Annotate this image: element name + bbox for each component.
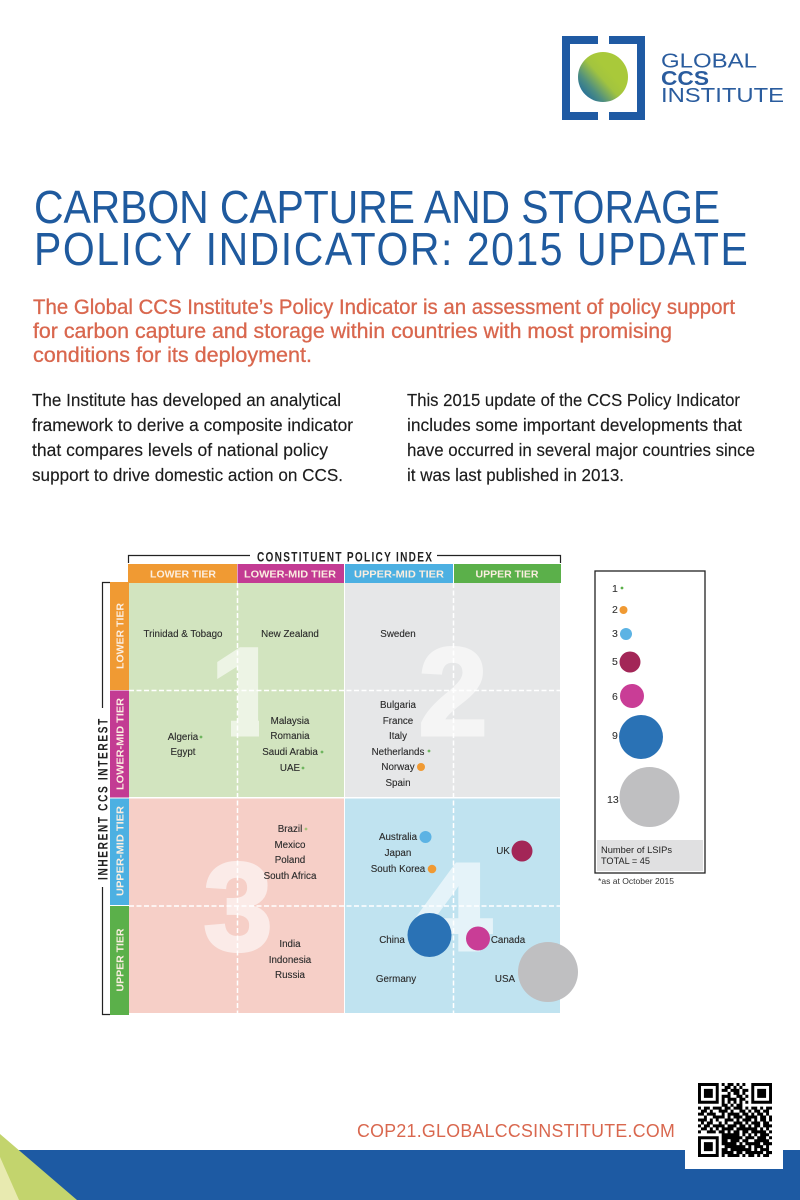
subtitle: conditions for its deployment. bbox=[33, 344, 312, 367]
title: POLICY INDICATOR: 2015 UPDATE bbox=[34, 225, 748, 276]
axis heading: constituent policy index: CONSTITUENT POLICY INDEX bbox=[257, 549, 433, 565]
text block: right column: includes some important developments that bbox=[407, 415, 742, 435]
quadrant 4 countries and bubbles: UK bbox=[496, 846, 510, 857]
quadrant 3: Poland bbox=[275, 855, 305, 866]
quadrant 2: 2 bbox=[418, 623, 488, 762]
text block: left column bbox=[32, 390, 353, 485]
text block: left column: that compares levels of national policy bbox=[32, 440, 328, 460]
title bbox=[34, 183, 748, 276]
quadrant 2 bbox=[345, 583, 560, 797]
quadrant 1: Trinidad & Tobago bbox=[144, 629, 223, 640]
quadrant 2: Netherlands bbox=[372, 747, 425, 758]
text block: right column: This 2015 update of the CCS Policy Indicator bbox=[407, 390, 740, 410]
legend entries: 1 bbox=[612, 583, 618, 595]
quadrant 3: Brazil bbox=[278, 824, 302, 835]
quadrant 3: Russia bbox=[275, 970, 306, 981]
quadrant 1: Algeria bbox=[168, 732, 199, 743]
quadrant 4 countries and bubbles bbox=[371, 831, 578, 1002]
legend total box bbox=[597, 840, 703, 871]
quadrant 1 bbox=[129, 583, 344, 797]
legend entries: 6 bbox=[612, 691, 618, 703]
website url: COP21.GLOBALCCSINSTITUTE.COM bbox=[357, 1121, 675, 1141]
subtitle: for carbon capture and storage within countries with most promising bbox=[33, 320, 672, 343]
icon: brackets and globe bbox=[562, 36, 645, 120]
quadrant 2: Bulgaria bbox=[380, 700, 417, 711]
text block: left column: The Institute has developed an analytical bbox=[32, 390, 341, 410]
quadrant 2: Sweden bbox=[380, 629, 416, 640]
quadrant 1: Malaysia bbox=[271, 716, 310, 727]
quadrant 2: Norway bbox=[381, 762, 415, 773]
column tier headers: LOWER TIER bbox=[150, 568, 216, 580]
quadrant 4 bbox=[345, 798, 560, 1013]
quadrant 4 countries and bubbles: China bbox=[379, 935, 405, 946]
subtitle: The Global CCS Institute’s Policy Indicator is an assessment of policy support bbox=[33, 296, 735, 319]
quadrant 4 countries and bubbles: Australia bbox=[379, 832, 418, 843]
legend footnote: *as at October 2015 bbox=[598, 876, 674, 886]
quadrant 3: India bbox=[279, 939, 301, 950]
title: CARBON CAPTURE AND STORAGE bbox=[34, 183, 720, 234]
legend entries: 2 bbox=[612, 604, 618, 616]
quadrant 4 countries and bubbles: Germany bbox=[376, 974, 416, 985]
text block: right column bbox=[407, 390, 755, 485]
logo wordmark: CCS bbox=[661, 68, 709, 90]
axis heading: inherent CCS interest: INHERENT CCS INTEREST bbox=[95, 718, 111, 880]
quadrant 1: Saudi Arabia bbox=[262, 747, 318, 758]
legend entries: 13 bbox=[607, 794, 619, 806]
text block: left column: support to drive domestic action on CCS. bbox=[32, 465, 343, 485]
row tier headers: UPPER-MID TIER bbox=[114, 806, 126, 896]
legend entries: 5 bbox=[612, 656, 618, 668]
column tier headers: UPPER-MID TIER bbox=[354, 568, 444, 580]
quadrant 3: 3 bbox=[203, 838, 273, 977]
column tier headers bbox=[128, 564, 561, 583]
quadrant 4 countries and bubbles: USA bbox=[495, 974, 516, 985]
logo wordmark: INSTITUTE bbox=[661, 85, 784, 107]
quadrant 4 countries and bubbles: South Korea bbox=[371, 864, 426, 875]
logo wordmark bbox=[661, 50, 784, 107]
logo wordmark: GLOBAL bbox=[661, 50, 757, 72]
legend entries: 9 bbox=[612, 730, 618, 742]
column tier headers: LOWER-MID TIER bbox=[244, 568, 336, 580]
legend: number of LSIPs bbox=[595, 571, 705, 873]
quadrant 3: Mexico bbox=[274, 840, 306, 851]
quadrant 3: Indonesia bbox=[269, 955, 312, 966]
quadrant 2: Italy bbox=[389, 731, 407, 742]
quadrant 4: 4 bbox=[414, 838, 492, 977]
quadrant 3: South Africa bbox=[264, 871, 317, 882]
quadrant 2: France bbox=[383, 716, 414, 727]
quadrant 2: Spain bbox=[385, 778, 411, 789]
quadrant 1: New Zealand bbox=[261, 629, 319, 640]
row tier headers: UPPER TIER bbox=[114, 928, 126, 992]
row tier headers: LOWER-MID TIER bbox=[114, 698, 126, 790]
row tier headers: LOWER TIER bbox=[114, 603, 126, 669]
quadrant 4 countries and bubbles: Japan bbox=[385, 848, 411, 859]
axis heading: inherent CCS interest bbox=[95, 582, 111, 1014]
QR code bbox=[685, 1070, 783, 1169]
legend entries: 3 bbox=[612, 628, 618, 640]
legend total box: TOTAL = 45 bbox=[601, 856, 650, 867]
footer band bbox=[0, 1134, 800, 1200]
axis heading: constituent policy index bbox=[128, 549, 560, 565]
legend total box: Number of LSIPs bbox=[601, 845, 672, 856]
quadrant 1: Romania bbox=[270, 731, 310, 742]
legend entries bbox=[607, 583, 680, 827]
quadrant 1: UAE bbox=[280, 763, 301, 774]
quadrant 1: 1 bbox=[210, 623, 280, 762]
text block: left column: framework to derive a composite indicator bbox=[32, 415, 353, 435]
row tier headers bbox=[110, 582, 129, 1015]
text block: right column: it was last published in 2013. bbox=[407, 465, 624, 485]
subtitle bbox=[33, 296, 735, 367]
chart: policy matrix bbox=[95, 549, 578, 1015]
quadrant 1: Egypt bbox=[170, 747, 196, 758]
quadrant 3 bbox=[129, 798, 344, 1013]
logo: Global CCS Institute bbox=[562, 36, 784, 120]
text block: right column: have occurred in several major countries since bbox=[407, 440, 755, 460]
column tier headers: UPPER TIER bbox=[475, 568, 539, 580]
grid dividers bbox=[129, 583, 560, 1013]
quadrant 4 countries and bubbles: Canada bbox=[491, 935, 526, 946]
